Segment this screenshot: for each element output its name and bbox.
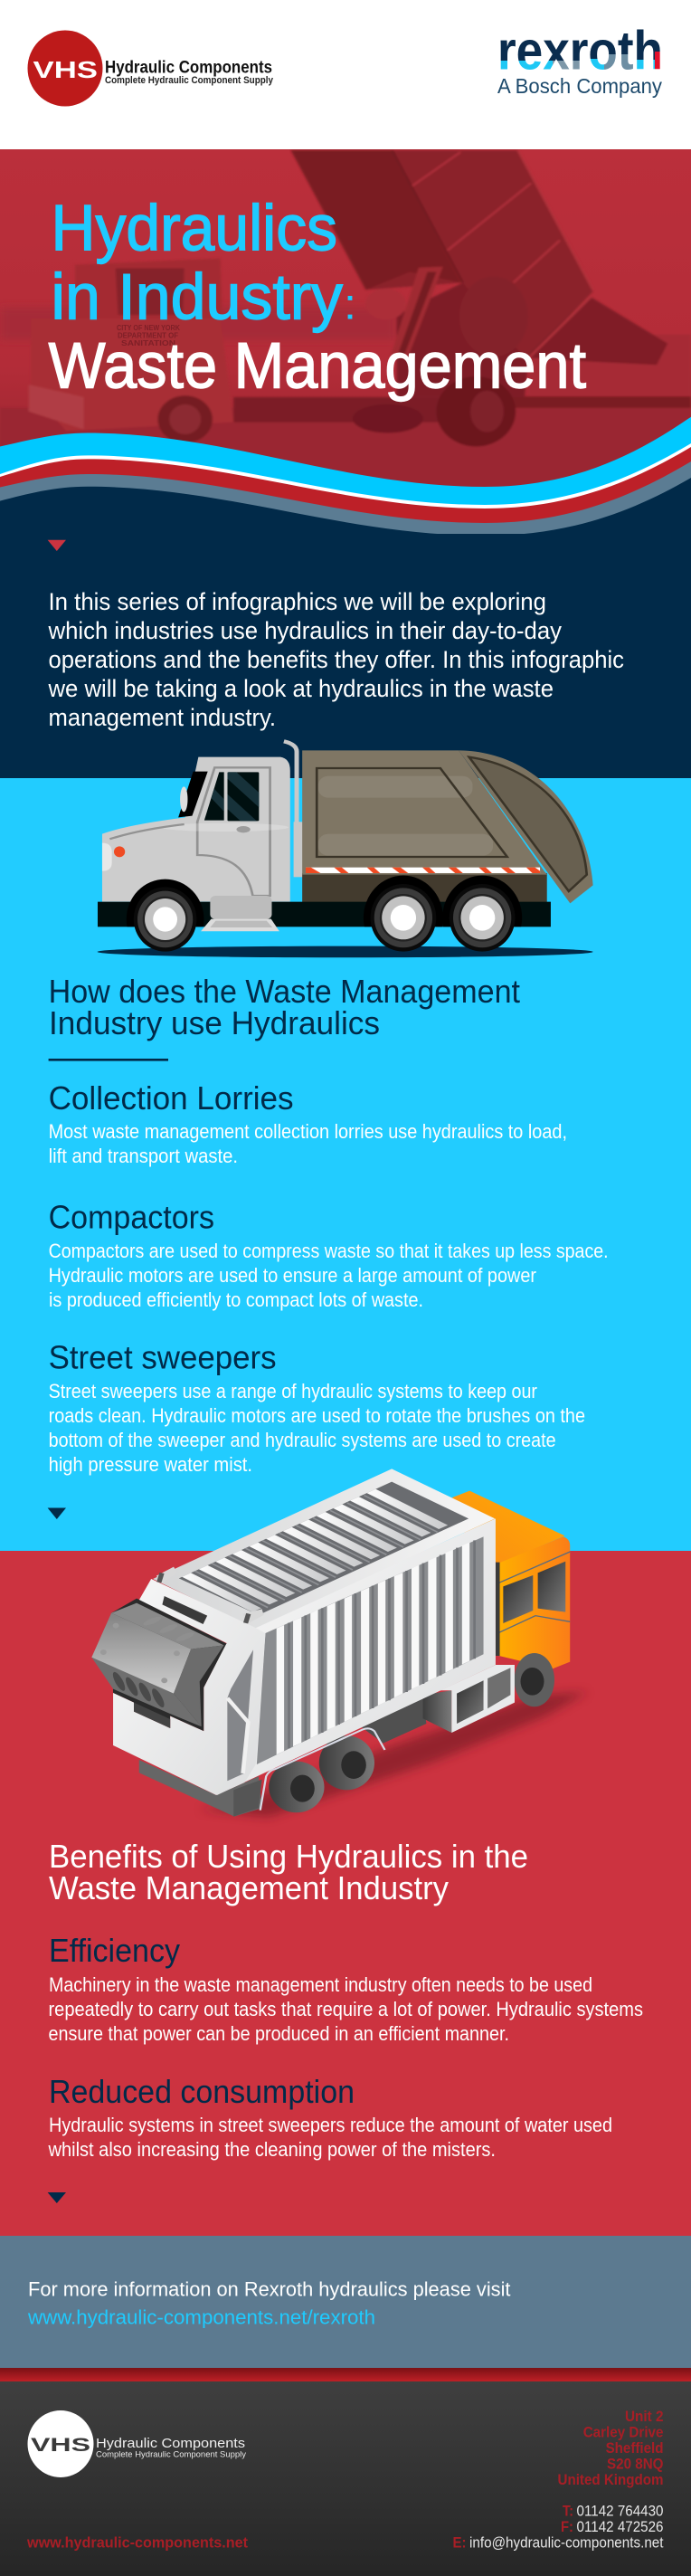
- section heading: Waste Management Industry: [49, 1869, 449, 1906]
- block: collection lorries: [49, 1079, 567, 1167]
- footer panel: [0, 2381, 691, 2576]
- hero photo: door lettering: [117, 324, 180, 347]
- block: reduced consumption: Hydraulic systems in street sweepers reduce the amount of water used: [49, 2114, 612, 2136]
- block: street sweepers: Street sweepers use a range of hydraulic systems to keep our: [49, 1380, 537, 1402]
- footer contact details: [452, 2503, 664, 2552]
- footer contact details: 01142 764430: [577, 2503, 664, 2520]
- footer contact details: T:: [563, 2503, 573, 2520]
- Rexroth logo: A Bosch Company: [497, 74, 662, 98]
- footer contact details: 01142 472526: [577, 2518, 664, 2535]
- hero panel with tipping truck photo: [0, 149, 691, 515]
- block: reduced consumption: Reduced consumption: [49, 2073, 355, 2110]
- block: efficiency: Efficiency: [49, 1932, 180, 1969]
- panel: more information: For more information on Rexroth hydraulics please visit: [28, 2278, 510, 2301]
- block: efficiency: Machinery in the waste management industry often needs to be used: [49, 1973, 592, 1996]
- ground shadow: [200, 1692, 587, 1817]
- block: collection lorries: Most waste management collection lorries use hydraulics to load,: [49, 1120, 567, 1143]
- footer VHS logo: Hydraulic Components: [96, 2436, 245, 2451]
- arrow: navy down triangle: [48, 1507, 66, 1519]
- footer contact details: F:: [561, 2518, 573, 2535]
- intro text: operations and the benefits they offer. In this infographic: [49, 646, 624, 673]
- footer address: S20 8NQ: [607, 2456, 664, 2473]
- panel: benefits: [0, 1551, 691, 2236]
- VHS logo: Hydraulic Components: [105, 58, 272, 78]
- tailgate: [459, 750, 593, 903]
- VHS logo: Complete Hydraulic Component Supply: [105, 75, 274, 86]
- rear body: [111, 1567, 265, 1795]
- intro text: which industries use hydraulics in their day-to-day: [48, 617, 562, 644]
- VHS logo: [27, 31, 274, 107]
- footer website: www.hydraulic-components.net: [26, 2534, 248, 2552]
- panel: introduction: [0, 534, 691, 778]
- footer address: Sheffield: [606, 2439, 664, 2457]
- arrow: navy down triangle: [48, 2192, 66, 2203]
- block: compactors: Compactors: [49, 1198, 214, 1236]
- step box: [423, 1665, 515, 1733]
- header bar: [0, 0, 691, 149]
- hero title: [49, 194, 586, 403]
- footer address: Unit 2: [625, 2408, 664, 2425]
- chassis: [98, 902, 551, 927]
- footer contact details: E:: [452, 2534, 467, 2552]
- block: reduced consumption: whilst also increasing the cleaning power of the misters.: [48, 2138, 496, 2161]
- red divider band: [0, 2368, 691, 2381]
- underframe: [139, 1698, 426, 1817]
- hero title: :: [344, 281, 356, 329]
- front wheel: [515, 1653, 554, 1706]
- block: street sweepers: high pressure water mist.: [49, 1453, 252, 1476]
- illustration: side view refuse truck: [98, 741, 593, 960]
- orange cab: [452, 1491, 570, 1668]
- intro text: In this series of infographics we will be exploring: [49, 588, 546, 615]
- section heading: [49, 973, 520, 1041]
- panel: how hydraulics are used: [0, 778, 691, 1551]
- intro text: management industry.: [49, 704, 276, 731]
- footer address: [557, 2408, 664, 2488]
- hero photo: door lettering: DEPARTMENT OF: [118, 331, 178, 340]
- block: compactors: [49, 1198, 609, 1311]
- hero photo: door lettering: SANITATION: [121, 339, 175, 347]
- block: efficiency: [49, 1932, 643, 2045]
- intro text: [48, 588, 624, 731]
- step: [201, 896, 279, 931]
- block: compactors: Hydraulic motors are used to ensure a large amount of power: [49, 1264, 536, 1287]
- footer VHS logo: Complete Hydraulic Component Supply: [96, 2450, 246, 2459]
- block: compactors: Compactors are used to compress waste so that it takes up less space.: [49, 1240, 609, 1262]
- block: street sweepers: roads clean. Hydraulic motors are used to rotate the brushes on the: [49, 1404, 585, 1427]
- hero photo: tipping dust cart: [0, 149, 691, 448]
- body side: [217, 1518, 496, 1795]
- panel: more information: [0, 2236, 691, 2368]
- VHS logo: VHS: [33, 56, 98, 83]
- block: street sweepers: bottom of the sweeper and hydraulic systems are used to create: [49, 1429, 556, 1451]
- hero title: Hydraulics: [51, 194, 337, 265]
- block: reduced consumption: [48, 2073, 612, 2161]
- Rexroth logo: rexroth: [497, 20, 663, 81]
- block: efficiency: repeatedly to carry out tasks that require a lot of power. Hydraulic systems: [49, 1998, 643, 2020]
- section heading: How does the Waste Management: [49, 973, 520, 1010]
- wheels: [127, 876, 522, 960]
- block: street sweepers: Street sweepers: [49, 1339, 277, 1376]
- rear wheels: [269, 1735, 374, 1812]
- hero photo: door lettering: CITY OF NEW YORK: [117, 324, 180, 332]
- footer VHS logo: [27, 2410, 246, 2477]
- illustration: isometric refuse truck: [91, 1469, 587, 1817]
- footer address: United Kingdom: [557, 2471, 664, 2488]
- footer contact details: info@hydraulic-components.net: [469, 2534, 664, 2552]
- wave divider: [0, 417, 691, 633]
- block: collection lorries: Collection Lorries: [49, 1079, 294, 1117]
- panel: more information: www.hydraulic-components.net/rexroth: [27, 2306, 375, 2329]
- section heading: [49, 1838, 528, 1906]
- section heading: Industry use Hydraulics: [49, 1004, 380, 1041]
- footer VHS logo: VHS: [31, 2435, 90, 2456]
- intro text: we will be taking a look at hydraulics in the waste: [48, 675, 554, 702]
- footer address: Carley Drive: [583, 2424, 664, 2441]
- fender rail: [260, 1728, 384, 1811]
- hero title: in Industry: [51, 262, 343, 334]
- block: compactors: is produced efficiently to compact lots of waste.: [49, 1288, 423, 1311]
- hopper: [91, 1596, 227, 1728]
- cab: [102, 757, 290, 902]
- hero title: Waste Management: [49, 331, 586, 403]
- block: street sweepers: [49, 1339, 585, 1476]
- arrow: red down triangle: [48, 540, 66, 551]
- roof: [153, 1469, 495, 1629]
- heading rule: [49, 1059, 168, 1061]
- block: efficiency: ensure that power can be produced in an efficient manner.: [49, 2022, 509, 2045]
- section heading: Benefits of Using Hydraulics in the: [49, 1838, 528, 1875]
- hazard stripe: [306, 868, 540, 873]
- block: collection lorries: lift and transport waste.: [49, 1145, 238, 1167]
